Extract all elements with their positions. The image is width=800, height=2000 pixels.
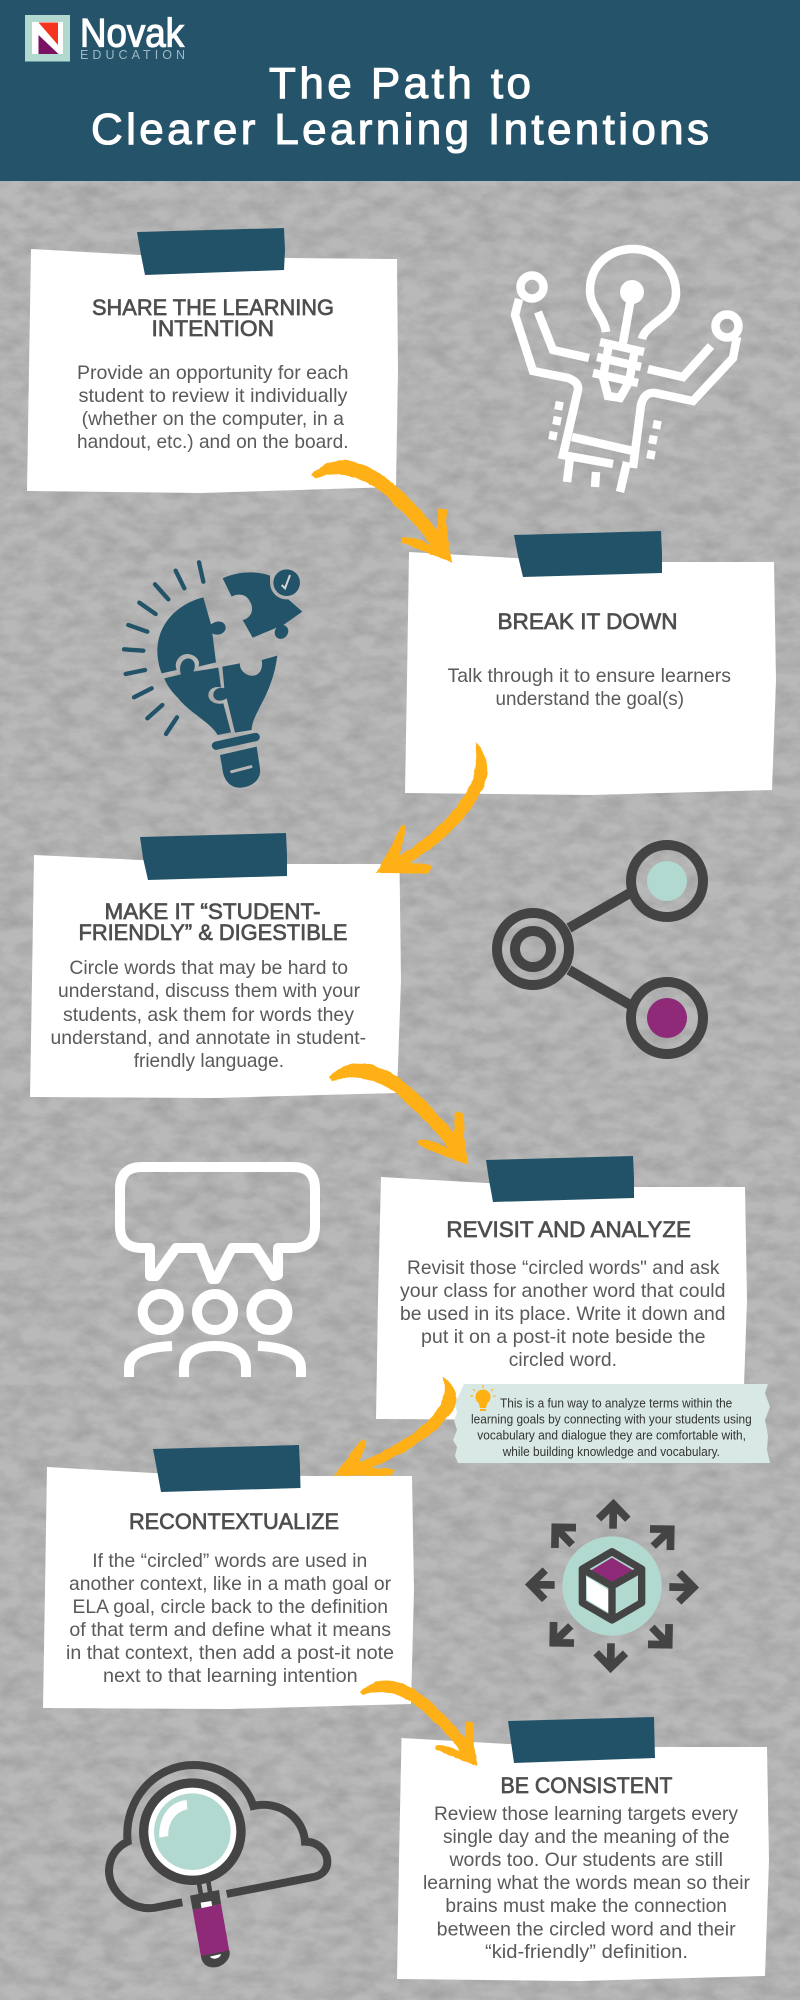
- arrow: step 2 to step 3: [376, 742, 487, 874]
- body text: [77, 362, 348, 453]
- body text: be used in its place. Write it down and: [400, 1303, 726, 1325]
- body text: next to that learning intention: [103, 1665, 358, 1687]
- panel: break it down: [405, 531, 776, 795]
- callout: fun way tip: [453, 1384, 770, 1463]
- body text: your class for another word that could: [400, 1280, 726, 1302]
- heading: INTENTION: [152, 316, 274, 341]
- heading: REVISIT AND ANALYZE: [446, 1217, 691, 1242]
- panel: make it student-friendly: [30, 833, 401, 1098]
- arrow: step 3 to step 4: [329, 1063, 469, 1165]
- body text: Circle words that may be hard to: [69, 957, 348, 979]
- body text: circled word.: [509, 1349, 617, 1371]
- icon: tip bulb: [470, 1385, 496, 1411]
- heading: MAKE IT “STUDENT-: [104, 899, 320, 924]
- body text: Review those learning targets every: [434, 1803, 738, 1825]
- tip text: vocabulary and dialogue they are comfortable with,: [477, 1429, 746, 1443]
- body text: students, ask them for words they: [63, 1004, 354, 1026]
- body text: friendly language.: [134, 1050, 284, 1072]
- tape: [140, 833, 287, 880]
- body text: [448, 665, 731, 710]
- heading: SHARE THE LEARNING: [92, 295, 334, 320]
- tip text: [471, 1397, 752, 1459]
- logo: Novak Education: EDUCATION: [80, 48, 185, 62]
- body text: Revisit those “circled words" and ask: [407, 1257, 720, 1279]
- heading: FRIENDLY” & DIGESTIBLE: [78, 920, 348, 945]
- arrow: step 4 to step 5: [333, 1377, 457, 1476]
- body text: [400, 1257, 726, 1371]
- tip text: This is a fun way to analyze terms within the: [500, 1397, 732, 1411]
- body text: handout, etc.) and on the board.: [77, 431, 348, 453]
- icon: speech bubble over three people: [120, 1167, 315, 1377]
- logo: Novak Education: [25, 12, 185, 62]
- arrow: step 1 to step 2: [312, 460, 452, 562]
- icon: network nodes: [497, 845, 703, 1054]
- body text: of that term and define what it means: [69, 1619, 391, 1641]
- body text: single day and the meaning of the: [443, 1826, 730, 1848]
- panel: share the learning intention: [27, 228, 398, 493]
- body text: (whether on the computer, in a: [82, 408, 344, 430]
- body text: learning what the words mean so their: [423, 1872, 750, 1894]
- title: The Path to: [269, 59, 531, 108]
- body text: If the “circled” words are used in: [92, 1550, 367, 1572]
- body text: brains must make the connection: [445, 1895, 727, 1917]
- tape: [486, 1156, 634, 1202]
- panel: recontextualize: [43, 1445, 414, 1709]
- tape: [153, 1445, 300, 1492]
- body text: [50, 957, 366, 1072]
- body text: understand the goal(s): [496, 688, 684, 710]
- panel: be consistent: [397, 1717, 769, 1981]
- icon: lightbulb circuit figure: [515, 249, 738, 492]
- body text: [423, 1803, 750, 1963]
- heading: RECONTEXTUALIZE: [129, 1509, 339, 1534]
- arrow: step 5 to step 6: [360, 1680, 478, 1766]
- icon: puzzle lightbulb: [124, 562, 302, 788]
- heading: BE CONSISTENT: [500, 1773, 673, 1798]
- icon: cube with eight arrows: [530, 1504, 694, 1668]
- heading: [92, 295, 334, 341]
- title: [91, 59, 709, 154]
- logo: Novak Education: Novak: [80, 12, 185, 56]
- body text: understand, and annotate in student-: [50, 1027, 366, 1049]
- header banner: [0, 0, 800, 181]
- body text: put it on a post-it note beside the: [421, 1326, 706, 1348]
- body text: in that context, then add a post-it note: [66, 1642, 394, 1664]
- body text: another context, like in a math goal or: [69, 1573, 392, 1595]
- title: Clearer Learning Intentions: [91, 105, 709, 154]
- tip text: learning goals by connecting with your students using: [471, 1413, 752, 1427]
- heading: BREAK IT DOWN: [498, 609, 678, 634]
- body text: words too. Our students are still: [449, 1849, 723, 1871]
- body text: student to review it individually: [78, 385, 348, 407]
- body text: [66, 1550, 394, 1687]
- body text: understand, discuss them with your: [58, 980, 360, 1002]
- body text: Talk through it to ensure learners: [448, 665, 731, 687]
- tip text: while building knowledge and vocabulary.: [502, 1445, 720, 1459]
- body text: between the circled word and their: [437, 1918, 736, 1940]
- heading: [78, 899, 348, 945]
- body text: Provide an opportunity for each: [77, 362, 348, 384]
- panel: revisit and analyze: [376, 1156, 747, 1420]
- body text: ELA goal, circle back to the definition: [72, 1596, 388, 1618]
- tape: [514, 531, 662, 577]
- tape: [137, 228, 285, 275]
- tape: [508, 1717, 655, 1763]
- body text: “kid-friendly” definition.: [485, 1941, 688, 1963]
- icon: magnifying glass over cloud: [109, 1765, 327, 1967]
